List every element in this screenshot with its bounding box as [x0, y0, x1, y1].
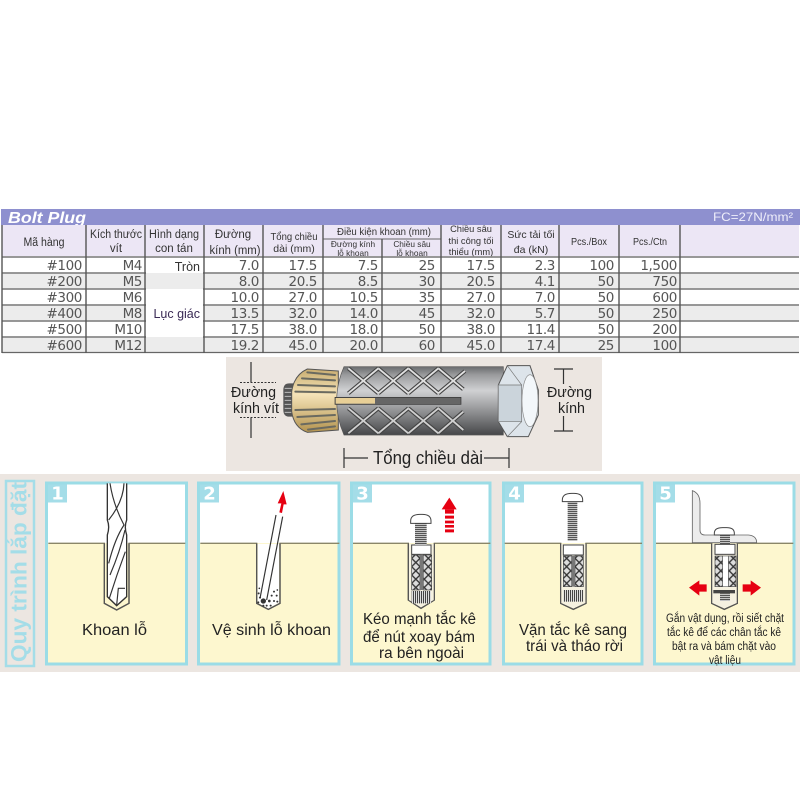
table data rows	[47, 258, 677, 354]
table header row: Tổng chiều	[270, 231, 318, 243]
table data rows: #300	[47, 290, 82, 306]
table data rows: 17.5	[467, 258, 495, 274]
table title bar	[1, 209, 800, 227]
heading: vertical title: Quy trình lắp đặt	[6, 481, 32, 662]
table header row: thi công tối	[449, 236, 493, 246]
illustration: bolt plug	[283, 366, 538, 437]
table data rows: 19.2	[231, 338, 259, 354]
table header row: lỗ khoan	[396, 248, 428, 258]
table data rows: #100	[47, 258, 82, 274]
table data rows: 17.5	[231, 322, 259, 338]
table data rows: 50	[419, 322, 435, 338]
caption: step 5: bật ra và bám chặt vào	[672, 641, 776, 653]
caption: step 4	[519, 622, 627, 655]
table header row: vít	[110, 243, 123, 255]
table data rows: 32.0	[289, 306, 317, 322]
table data rows: M6	[123, 290, 142, 306]
table data rows: M8	[123, 306, 142, 322]
table data rows: 10.5	[350, 290, 378, 306]
table header row: Mã hàng	[24, 237, 64, 249]
step 1: drill hole: 1	[51, 484, 64, 504]
table data rows: 7.0	[239, 258, 259, 274]
table data rows: 30	[419, 274, 435, 290]
table data rows: M12	[114, 338, 142, 354]
caption: step 4: Vặn tắc kê sang	[519, 622, 627, 639]
table data rows: 250	[652, 306, 677, 322]
table header row: lỗ khoan	[337, 248, 369, 258]
table header row: Pcs./Box	[571, 236, 608, 248]
dimension: diameter	[547, 369, 592, 431]
step 3: pull anchor: 3	[356, 484, 369, 504]
table header row: Pcs./Ctn	[633, 236, 667, 248]
table data rows: 11.4	[527, 322, 555, 338]
step 5: fix object: 5	[659, 484, 672, 504]
caption: step 3: ra bên ngoài	[379, 645, 464, 662]
table data rows: 38.0	[467, 322, 495, 338]
table header row: Chiều sâu	[450, 224, 492, 234]
caption: step 5: Gắn vật dụng, rồi siết chặt	[666, 612, 785, 625]
table data rows: 50	[598, 290, 614, 306]
table data rows: #500	[47, 322, 82, 338]
caption: step 1: Khoan lỗ	[82, 622, 147, 639]
illustration: anchor pulled up	[353, 498, 490, 608]
table header row: kính (mm)	[210, 245, 261, 257]
caption: step 3: Kéo mạnh tắc kê	[363, 611, 476, 628]
table row shading and grid	[2, 225, 799, 353]
dimension: total length: Tổng chiều dài	[373, 447, 483, 468]
caption: step 3: để nút xoay bám	[363, 629, 475, 646]
illustration: cleaning tube in hole	[200, 491, 339, 609]
table data rows: 35	[419, 290, 435, 306]
table header row	[2, 224, 799, 258]
caption: step 2: Vệ sinh lỗ khoan	[212, 622, 331, 639]
caption: step 5	[666, 612, 785, 667]
table data rows: 50	[598, 306, 614, 322]
step 5: fix object	[654, 483, 794, 667]
table data rows: M5	[123, 274, 142, 290]
dimension: screw diameter	[231, 362, 280, 438]
table data rows: 20.5	[467, 274, 495, 290]
table data rows: 60	[419, 338, 435, 354]
table data rows: 20.5	[289, 274, 317, 290]
table data rows: 100	[589, 258, 614, 274]
table data rows: 20.0	[350, 338, 378, 354]
table data rows: 14.0	[350, 306, 378, 322]
table data rows: 25	[598, 338, 614, 354]
table data rows: 50	[598, 274, 614, 290]
table data rows: 7.0	[535, 290, 555, 306]
table data rows: M10	[114, 322, 142, 338]
table data rows: 1,500	[640, 258, 677, 274]
table header row: dài (mm)	[273, 243, 315, 255]
table data rows: 2.3	[535, 258, 555, 274]
illustration: screw removed from anchor	[505, 493, 642, 609]
table data rows: 17.5	[289, 258, 317, 274]
panel: installation process	[0, 474, 800, 672]
table data rows: 8.0	[239, 274, 259, 290]
dimension: screw diameter: Đường	[231, 384, 276, 401]
table data rows: 25	[419, 258, 435, 274]
table header row: Đường kính	[331, 239, 375, 249]
step 1: drill hole	[46, 483, 186, 664]
caption: step 5: tắc kê để các chân tắc kê	[667, 626, 781, 639]
table title bar: Bolt Plug	[8, 210, 87, 227]
caption: step 3	[363, 611, 476, 662]
table header row: Đường	[215, 229, 251, 241]
table: Bolt Plug specifications	[1, 209, 800, 354]
table header row: thiểu (mm)	[449, 247, 493, 257]
dimension: screw diameter: kính vít	[233, 400, 280, 417]
table data rows: 38.0	[289, 322, 317, 338]
illustration: drill bit in hole	[48, 483, 185, 610]
step 2: clean hole	[198, 483, 339, 664]
table header row: con tán	[155, 243, 193, 255]
table data rows: 4.1	[535, 274, 555, 290]
caption: step 5: vật liệu	[709, 655, 741, 667]
table data rows: 45.0	[467, 338, 495, 354]
table data rows: 32.0	[467, 306, 495, 322]
table data rows: 100	[652, 338, 677, 354]
table data rows: 13.5	[231, 306, 259, 322]
table data rows: 10.0	[231, 290, 259, 306]
panel: bolt plug diagram	[226, 357, 602, 471]
dimension: diameter: Đường	[547, 384, 592, 401]
caption: step 4: trái và tháo rời	[526, 638, 623, 655]
table data rows: 750	[652, 274, 677, 290]
table data rows: 18.0	[350, 322, 378, 338]
table data rows: 45.0	[289, 338, 317, 354]
table data rows: #200	[47, 274, 82, 290]
table header row: Hình dạng	[149, 229, 199, 241]
table data rows: 200	[652, 322, 677, 338]
table header row: Điều kiện khoan (mm)	[337, 227, 431, 238]
table title bar: FC=27N/mm²	[713, 210, 793, 224]
table data rows: M4	[123, 258, 142, 274]
step 4: turn and remove: 4	[508, 484, 521, 504]
table data rows: 27.0	[289, 290, 317, 306]
table data rows: 45	[419, 306, 435, 322]
table header row: đa (kN)	[514, 244, 548, 256]
table data rows: 27.0	[467, 290, 495, 306]
table data rows: 7.5	[358, 258, 378, 274]
table data rows: #600	[47, 338, 82, 354]
step 3: pull anchor	[352, 483, 490, 664]
illustration: bracket fastened with anchor	[656, 491, 793, 609]
table data rows: 50	[598, 322, 614, 338]
table data rows: 600	[652, 290, 677, 306]
table data rows: 8.5	[358, 274, 378, 290]
table data rows: #400	[47, 306, 82, 322]
dimension: diameter: kính	[558, 400, 585, 417]
table data rows: 17.4	[527, 338, 555, 354]
table data rows: Tròn	[175, 260, 200, 274]
table data rows: Lục giác	[153, 307, 200, 321]
table header row: Sức tải tối	[507, 229, 555, 241]
table header row: Chiều sâu	[393, 239, 431, 249]
step 4: turn and remove	[504, 483, 642, 664]
table data rows: 5.7	[535, 306, 555, 322]
step 2: clean hole: 2	[203, 484, 216, 504]
table header row: Kích thước	[90, 229, 142, 241]
